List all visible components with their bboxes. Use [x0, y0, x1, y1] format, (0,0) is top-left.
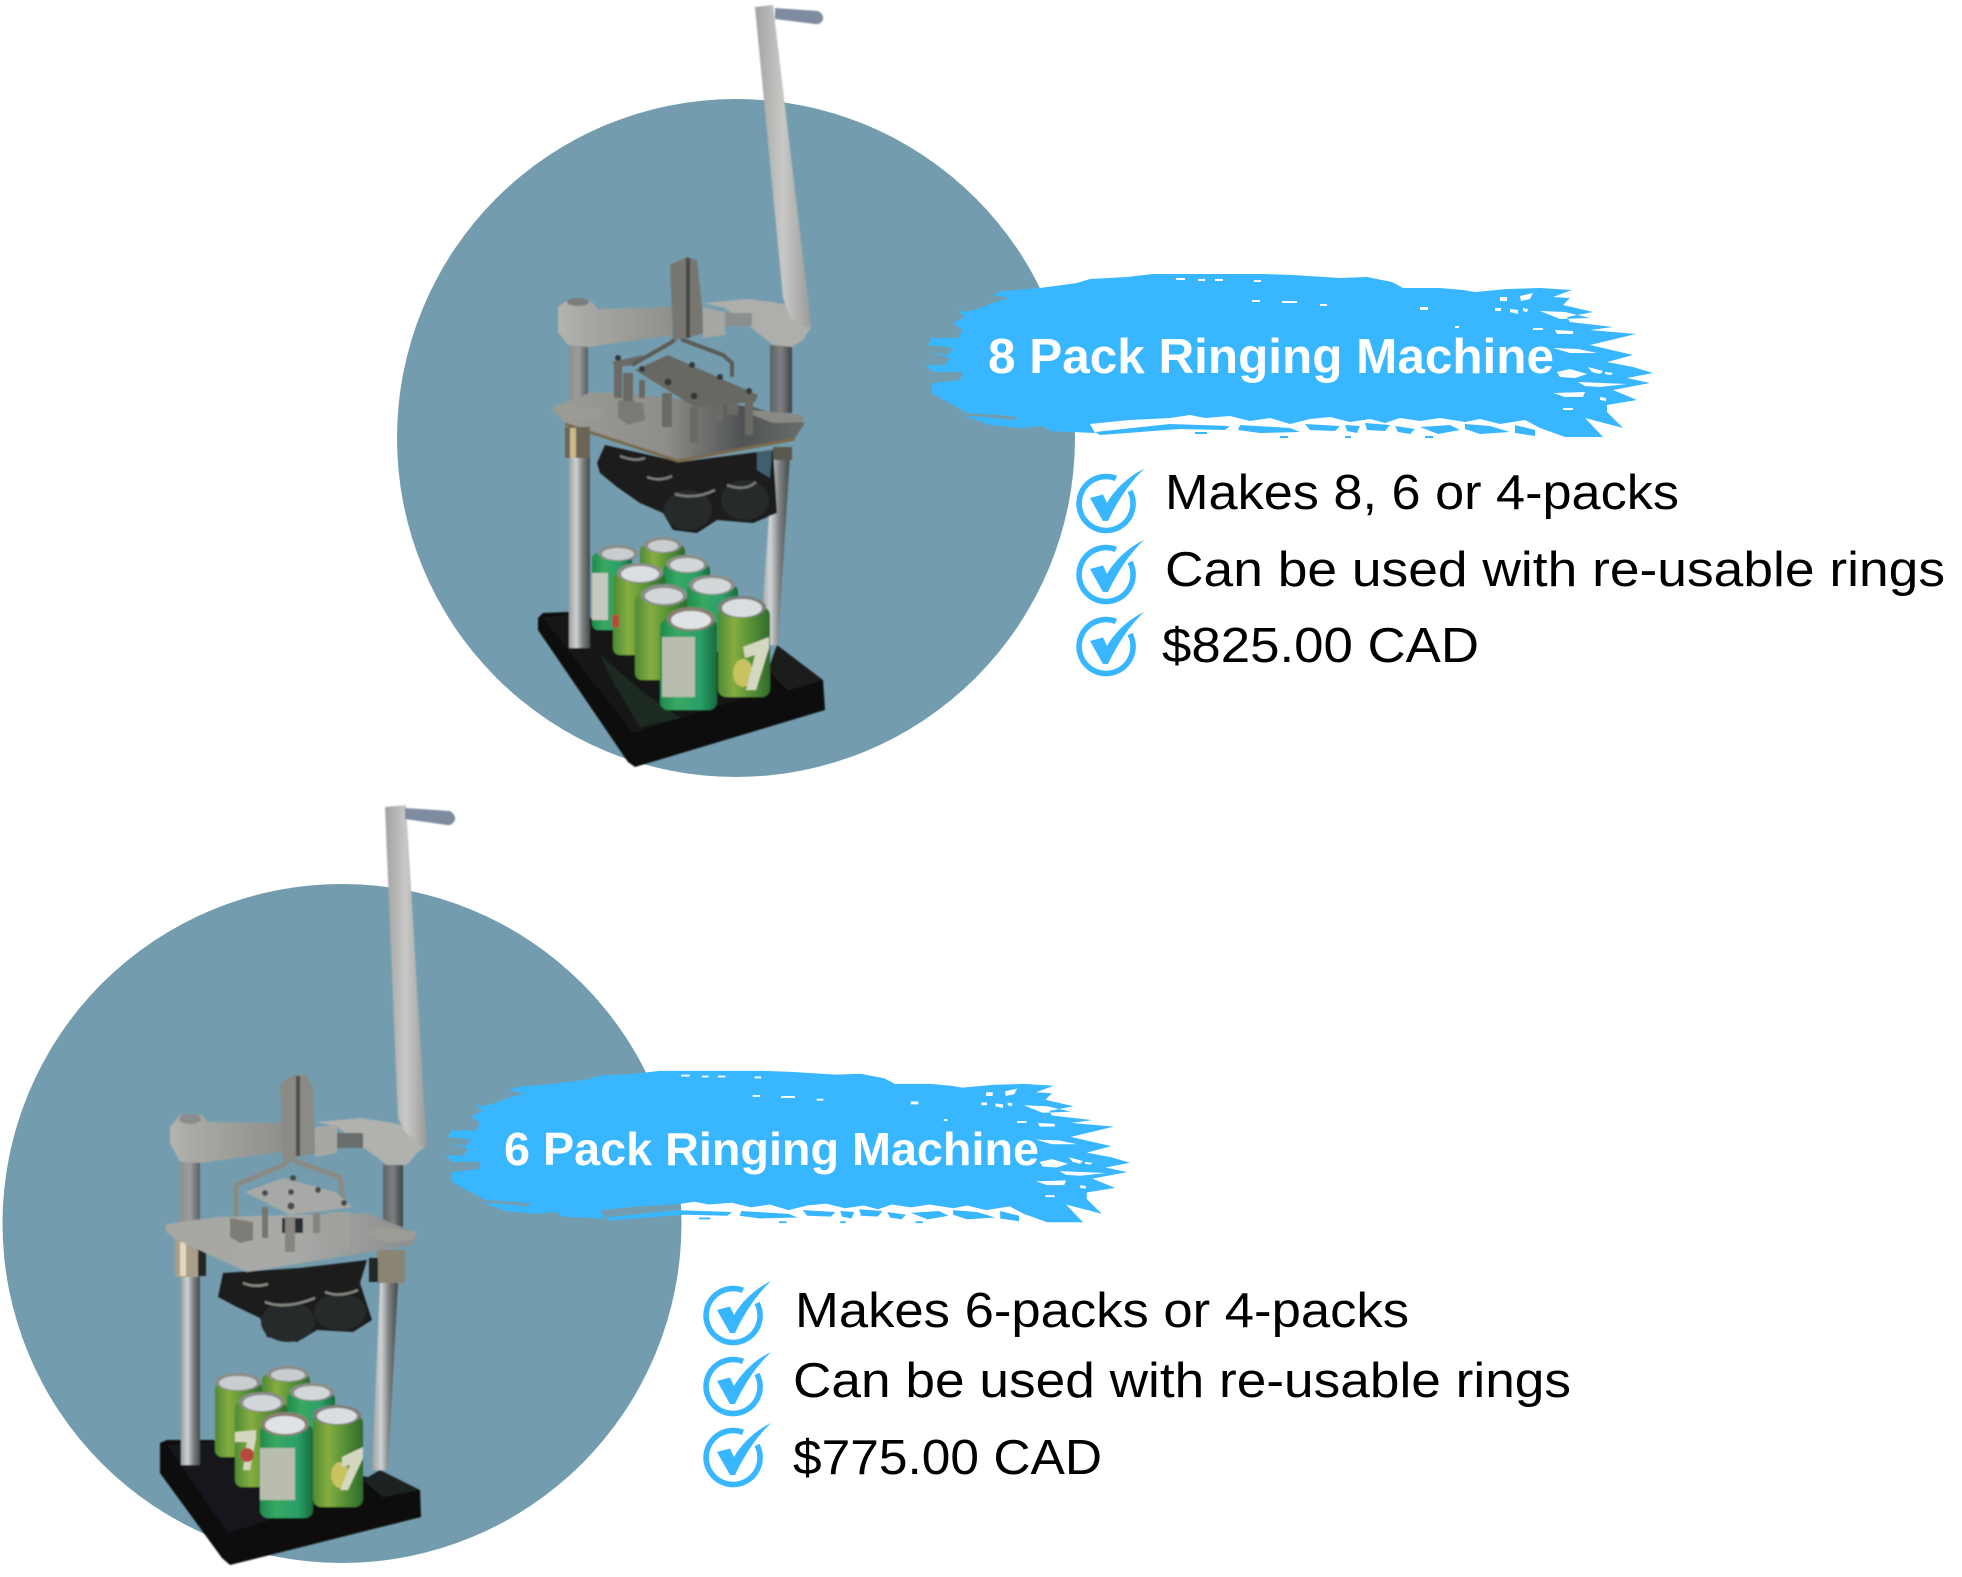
carrier foot: [618, 400, 645, 425]
plate bolts: [615, 355, 752, 400]
lever grip: [775, 8, 823, 24]
machine photo: 6 pack: [160, 805, 455, 1565]
blue circle backdrop: [2, 884, 682, 1563]
rubber ring heads: [218, 1260, 372, 1342]
plate collars: [553, 405, 803, 460]
check icon 2: [706, 1352, 771, 1414]
cans: [215, 1366, 363, 1518]
centre seam: [296, 1076, 300, 1156]
linkage collar: [703, 307, 725, 338]
price text: $825.00 CAD: [1162, 619, 1479, 673]
right arm: [317, 1118, 427, 1165]
carrier posts: [262, 1207, 350, 1252]
feature list: 8 pack: [1079, 466, 1945, 674]
base ledge: [768, 645, 823, 690]
feature text 2: Can be used with re-usable rings: [1165, 543, 1945, 597]
rubber ring heads: [597, 445, 777, 533]
plate feet: [165, 1222, 417, 1243]
check icon 3: [706, 1423, 771, 1485]
base plate: [160, 1440, 421, 1565]
press plate: [165, 1213, 417, 1272]
check icon 3: [1079, 612, 1144, 674]
feature list: 6 pack: [706, 1281, 1571, 1485]
carrier posts: [614, 365, 753, 443]
centre seam: [686, 258, 690, 338]
check icon 2: [1079, 540, 1144, 602]
carrier bracket: [612, 355, 643, 367]
carrier foot: [230, 1218, 253, 1243]
cans: [592, 537, 770, 710]
lever arm: [755, 5, 811, 328]
upper columns: [180, 1160, 403, 1233]
panel: 6 pack ringing machine: [2, 805, 1571, 1565]
crossbar cap: [179, 1114, 201, 1124]
upper columns: [569, 345, 792, 413]
heading text: 8 Pack Ringing Machine: [988, 330, 1554, 384]
machine photo: 8 pack: [538, 5, 825, 767]
price text: $775.00 CAD: [793, 1431, 1102, 1485]
top plate: [635, 355, 758, 407]
top plate: [245, 1178, 353, 1215]
plate edge: [565, 424, 795, 461]
base ledge: [363, 1470, 420, 1497]
base plate: [538, 612, 825, 767]
lower columns: [569, 440, 790, 648]
centre block: [280, 1075, 315, 1160]
linkage rod: [335, 1133, 363, 1148]
plate collars: [175, 1240, 405, 1283]
base top surface: [543, 614, 770, 733]
plate bolts: [262, 1175, 347, 1210]
crossbar: [170, 1115, 282, 1163]
brush heading: 8 pack: [925, 274, 1653, 438]
linkage rod: [722, 313, 752, 326]
brush heading: 6 pack: [445, 1071, 1130, 1223]
check icon 1: [1079, 469, 1144, 531]
wire yoke: [236, 1157, 343, 1217]
blue circle backdrop: [397, 99, 1075, 777]
panel: 8 pack ringing machine: [397, 5, 1945, 777]
base reflections: [600, 655, 680, 727]
feature text 1: Makes 8, 6 or 4-packs: [1165, 466, 1679, 520]
centre block: [670, 257, 703, 340]
lower columns: [181, 1275, 398, 1470]
right arm: [703, 299, 811, 347]
base top surface: [167, 1442, 363, 1533]
feature text 1: Makes 6-packs or 4-packs: [795, 1284, 1409, 1338]
wire yoke: [632, 333, 732, 377]
lever grip: [405, 808, 455, 825]
linkage collar: [315, 1125, 337, 1157]
crossbar: [558, 300, 672, 347]
crossbar cap: [567, 298, 589, 306]
check icon 1: [706, 1281, 771, 1343]
lever arm: [385, 805, 427, 1148]
press plate: [553, 392, 805, 460]
heading text: 6 Pack Ringing Machine: [504, 1123, 1039, 1175]
feature text 2: Can be used with re-usable rings: [793, 1354, 1571, 1408]
